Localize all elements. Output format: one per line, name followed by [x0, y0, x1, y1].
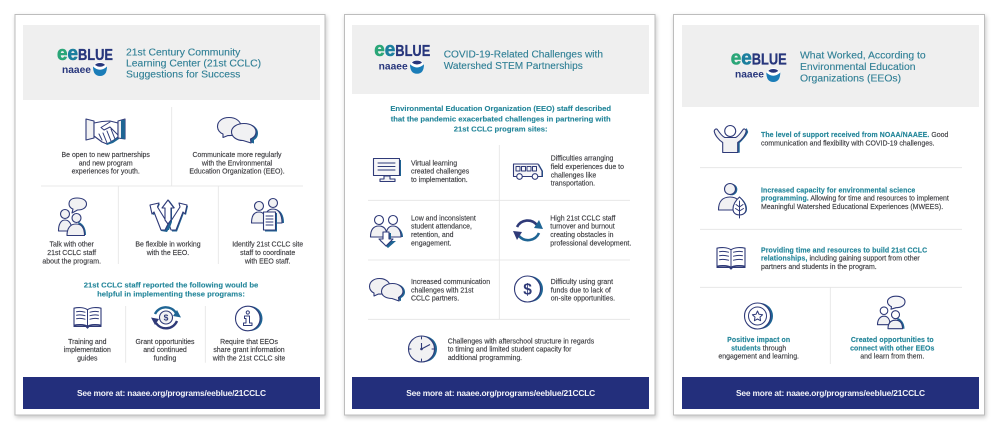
- logo: eeBLUE naaee: [374, 39, 430, 74]
- icon: computer monitor: [374, 158, 401, 182]
- text: build relationships: partners and students in the program.: [761, 264, 877, 271]
- logo: eeBLUE naaee: BLUE: [752, 51, 787, 68]
- subheading: 21st CCLC staff reported the following would be: [84, 280, 258, 289]
- icon: star medal: [744, 303, 773, 329]
- text: level of support: The level of support received from NOAA/NAAEE. Good: [761, 132, 948, 139]
- icon: information: [236, 306, 262, 331]
- subheading: that the pandemic exacerbated challenges in partnering with: [391, 114, 611, 123]
- logo: eeBLUE naaee: [57, 43, 113, 76]
- icon: open book: [74, 308, 102, 328]
- text: build relationships: Providing time and resources to build 21st CCLC: [761, 247, 927, 254]
- text: field experiences: transportation.: [551, 181, 595, 188]
- text: virtual learning: Virtual learning: [411, 160, 457, 167]
- icon: clock: [408, 336, 437, 362]
- icon: open book: [716, 248, 746, 269]
- text: positive impact: Positive impact on: [727, 337, 790, 344]
- icon: speech bubbles: [218, 118, 258, 144]
- text: communicate: Communicate more regularly: [192, 152, 282, 159]
- text: level of support: communication and flexibility with COVID-19 challenges.: [761, 140, 935, 147]
- text: be open: Be open to new partnerships: [62, 152, 150, 159]
- footer band: [352, 377, 649, 409]
- text: communication challenges: challenges with 21st: [411, 287, 474, 294]
- title: Environmental Education: [800, 62, 916, 73]
- text: field experiences: challenges like: [551, 172, 596, 179]
- footer link text: See more at: naaee.org/programs/eeblue/21CCLC: [77, 388, 266, 398]
- text: training guides: guides: [77, 355, 98, 362]
- text: communicate: Education Organization (EEO).: [189, 169, 285, 176]
- text: connect with EEOs: Created opportunities to: [851, 337, 934, 344]
- icon: group with speech bubble: [58, 198, 86, 236]
- header band: [682, 25, 979, 107]
- logo: eeBLUE naaee: [731, 47, 787, 82]
- subheading: Environmental Education Organization (EEO) staff described: [390, 104, 611, 113]
- text: be flexible: with the EEO.: [146, 250, 189, 257]
- text: talk with staff: Talk with other: [50, 242, 95, 249]
- text: afterschool structure: additional programming.: [448, 355, 522, 362]
- text: increased capacity: Meaningful Watershed Educational Experiences (MWEES).: [761, 204, 943, 211]
- text: talk with staff: 21st CCLC staff: [47, 250, 96, 257]
- icon: turnover cycle: [513, 220, 543, 240]
- text: share grant information: with the 21st CCLC site: [212, 355, 285, 362]
- text: positive impact: engagement and learning.: [718, 354, 799, 361]
- text: be flexible: Be flexible in working: [135, 242, 201, 249]
- subheading: helpful in implementing these programs:: [97, 289, 245, 298]
- subheading: 21st CCLC program sites:: [454, 125, 548, 134]
- icon: dollar coin: $: [523, 282, 532, 298]
- text: grant opportunities: and continued: [143, 347, 187, 354]
- text: attendance: engagement.: [411, 240, 452, 247]
- text: virtual learning: to implementation.: [411, 177, 468, 184]
- logo: eeBLUE naaee: ee: [374, 39, 395, 61]
- text: increased capacity: programming. Allowing for time and resources to implement: [761, 196, 949, 203]
- panel: covid-19 challenges: [344, 14, 655, 415]
- logo: eeBLUE naaee: ee: [731, 47, 752, 69]
- text: identify site staff: with EEO staff.: [244, 258, 291, 265]
- text: increased capacity: Increased capacity for environmental science: [761, 187, 915, 194]
- text: field experiences: Difficulties arranging: [551, 156, 614, 163]
- footer link text: See more at: naaee.org/programs/eeblue/21CCLC: [406, 388, 595, 398]
- text: connect with EEOs: and learn from them.: [860, 354, 924, 361]
- header band: [23, 25, 320, 100]
- title: Learning Center (21st CCLC): [126, 59, 261, 70]
- text: field experiences: field experiences due to: [551, 164, 624, 171]
- text: training guides: Training and: [68, 339, 107, 346]
- text: talk with staff: about the program.: [42, 258, 101, 265]
- title: What Worked, According to: [800, 50, 926, 61]
- icon: staff with document: [252, 198, 284, 232]
- icon: handshake: [86, 119, 125, 145]
- text: communicate: with the Environmental: [201, 160, 273, 167]
- text: be open: and new program: [79, 160, 133, 167]
- card background: [674, 14, 984, 415]
- text: attendance: Low and inconsistent: [411, 215, 476, 222]
- text: attendance: student attendance,: [411, 224, 472, 231]
- text: be open: experiences for youth.: [72, 169, 140, 176]
- icon: diverging arrows: [150, 200, 188, 232]
- text: build relationships: relationships, including gaining support from other: [761, 256, 920, 263]
- text: identify site staff: Identify 21st CCLC site: [232, 242, 303, 249]
- panel: what worked: [674, 14, 984, 415]
- text: connect with EEOs: connect with other EEOs: [850, 345, 935, 352]
- panel: suggestions for success: [15, 14, 325, 415]
- card background: [344, 14, 655, 415]
- text: staff turnover: turnover and burnout: [550, 224, 615, 231]
- text: virtual learning: created challenges: [411, 169, 470, 176]
- logo: eeBLUE naaee: naaee: [379, 61, 408, 72]
- icon: bus: [514, 164, 543, 179]
- text: identify site staff: staff to coordinate: [240, 250, 295, 257]
- text: grant funds: on-site opportunities.: [551, 296, 615, 303]
- text: afterschool structure: to timing and limited student capacity for: [448, 347, 572, 354]
- title: Suggestions for Success: [126, 70, 240, 81]
- text: grant opportunities: funding: [154, 355, 177, 362]
- text: communication challenges: Increased communication: [411, 279, 490, 286]
- text: grant funds: funds due to lack of: [551, 287, 611, 294]
- icon: grant cycle dollar: [151, 307, 181, 328]
- title: COVID-19-Related Challenges with: [444, 50, 603, 61]
- title: Watershed STEM Partnerships: [444, 61, 583, 72]
- icon: students with down arrow: [370, 216, 403, 248]
- icon: person with leaf: [718, 184, 747, 218]
- logo: eeBLUE naaee: naaee: [62, 65, 91, 76]
- icon: dollar coin: [514, 276, 543, 302]
- text: attendance: retention, and: [411, 232, 454, 239]
- icon: group with speech bubble: [878, 296, 905, 329]
- text: grant funds: Difficulty using grant: [551, 279, 613, 286]
- text: grant opportunities: Grant opportunities: [135, 339, 195, 346]
- logo: eeBLUE naaee: BLUE: [395, 43, 430, 60]
- text: communication challenges: CCLC partners.: [411, 296, 459, 303]
- footer band: [23, 377, 320, 409]
- text: positive impact: students through: [731, 345, 786, 352]
- text: staff turnover: creating obstacles in: [550, 232, 614, 239]
- icon: person with raised arms: [714, 126, 748, 153]
- icon: grant cycle dollar: $: [164, 312, 169, 322]
- header band: [352, 25, 649, 94]
- title: 21st Century Community: [126, 47, 241, 58]
- logo: eeBLUE naaee: naaee: [735, 69, 764, 80]
- logo: eeBLUE naaee: ee: [57, 43, 78, 65]
- text: staff turnover: professional development.: [550, 240, 631, 247]
- icon: speech bubbles: [370, 278, 405, 301]
- footer band: [682, 377, 979, 409]
- text: staff turnover: High 21st CCLC staff: [550, 215, 615, 222]
- title: Organizations (EEOs): [800, 73, 901, 84]
- logo: eeBLUE naaee: BLUE: [78, 47, 113, 64]
- footer link text: See more at: naaee.org/programs/eeblue/21CCLC: [736, 388, 925, 398]
- text: share grant information: Require that EEOs: [220, 339, 278, 346]
- card background: [15, 14, 325, 415]
- text: training guides: implementation: [64, 347, 111, 354]
- text: afterschool structure: Challenges with afterschool structure in regards: [448, 338, 595, 345]
- text: share grant information: share grant information: [213, 347, 285, 354]
